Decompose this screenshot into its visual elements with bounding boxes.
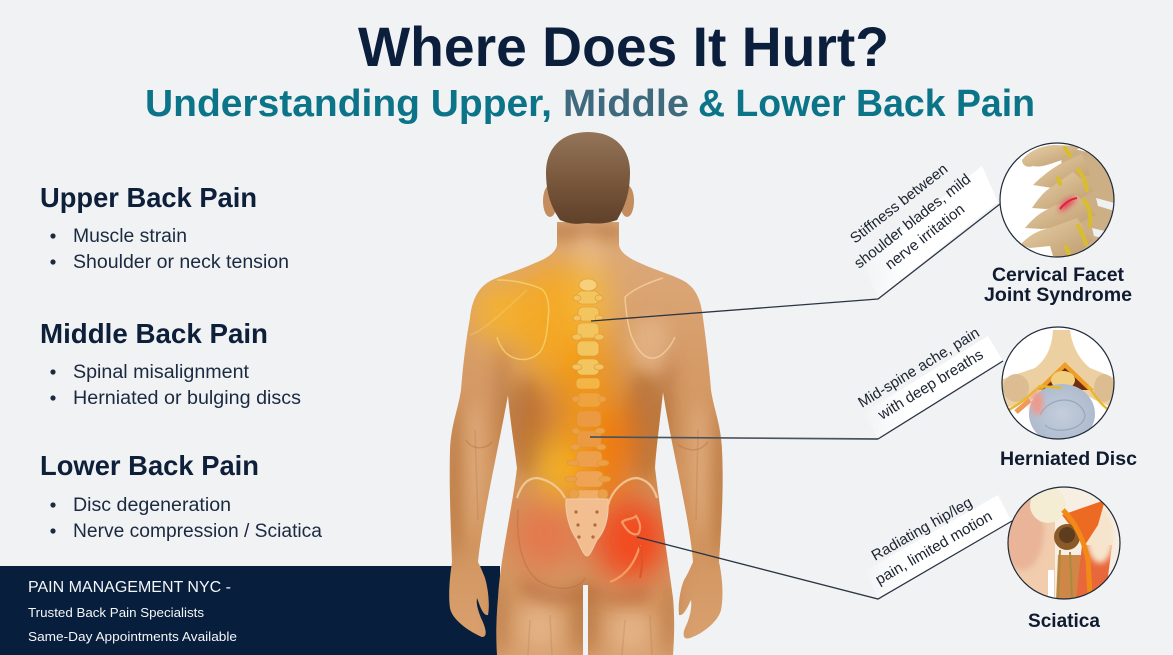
label: cervical facet: Cervical Facet bbox=[992, 264, 1124, 286]
panel: lower back pain bbox=[40, 450, 322, 542]
callout text: lower back: pain, limited motion bbox=[872, 508, 995, 588]
label: sciatica: Sciatica bbox=[1028, 610, 1100, 632]
callout text: upper back: shoulder blades, mild bbox=[851, 171, 974, 272]
leader line: upper back bbox=[591, 204, 1000, 321]
label: herniated disc: Herniated Disc bbox=[1000, 448, 1137, 470]
ears bbox=[543, 185, 634, 217]
callout: upper back bbox=[591, 160, 1000, 321]
subtitle: Middle bbox=[563, 83, 689, 125]
subtitle: & Lower Back Pain bbox=[698, 83, 1035, 125]
list: middle back causes: Spinal misalignment bbox=[73, 362, 250, 383]
leader line: lower back bbox=[637, 521, 1012, 599]
shading and pain glows bbox=[449, 224, 726, 655]
muscle outlines bbox=[466, 278, 708, 655]
hair bbox=[546, 132, 630, 224]
callout: lower back bbox=[637, 494, 1012, 599]
callout text: upper back: Stiffness between bbox=[847, 160, 951, 247]
leader line: middle back bbox=[590, 437, 878, 439]
heading: middle back: Middle Back Pain bbox=[40, 318, 268, 349]
label: cervical facet bbox=[984, 264, 1132, 306]
list: lower back causes: Disc degeneration bbox=[73, 495, 231, 516]
callout text: middle back: with deep breaths bbox=[874, 346, 986, 424]
list: middle back causes bbox=[50, 362, 301, 409]
list: upper back causes: Shoulder or neck tension bbox=[73, 252, 289, 273]
list: upper back causes: Muscle strain bbox=[73, 226, 187, 247]
subtitle: Understanding Upper, bbox=[145, 83, 552, 125]
list: lower back causes: Nerve compression / Sciatica bbox=[73, 521, 322, 542]
illustration: human back figure bbox=[449, 132, 726, 655]
hip joint highlight bbox=[610, 516, 642, 582]
icon: herniated disc bbox=[1000, 327, 1118, 444]
heading: upper back: Upper Back Pain bbox=[40, 182, 257, 213]
list: middle back causes: Herniated or bulging discs bbox=[73, 388, 301, 409]
list: lower back causes bbox=[50, 495, 322, 542]
label: cervical facet: Joint Syndrome bbox=[984, 284, 1132, 306]
title: Where Does It Hurt? bbox=[358, 15, 889, 78]
icon: sciatica bbox=[1000, 485, 1120, 605]
panel: middle back pain bbox=[40, 318, 301, 409]
body silhouette bbox=[449, 222, 723, 655]
sacrum bbox=[566, 499, 608, 556]
callout: middle back bbox=[590, 324, 1003, 439]
heading: lower back: Lower Back Pain bbox=[40, 450, 259, 481]
icon: cervical facet joint bbox=[1000, 143, 1120, 260]
panel: upper back pain bbox=[40, 182, 289, 273]
spine bbox=[565, 279, 611, 504]
list: upper back causes bbox=[50, 226, 289, 273]
footer banner bbox=[0, 566, 500, 655]
footer banner: PAIN MANAGEMENT NYC - bbox=[28, 579, 231, 596]
callout text: upper back: nerve irritation bbox=[882, 201, 968, 273]
footer banner: Trusted Back Pain Specialists bbox=[28, 606, 204, 620]
footer banner: Same-Day Appointments Available bbox=[28, 630, 237, 644]
callout text: middle back: Mid-spine ache, pain bbox=[855, 324, 983, 411]
callout text: lower back: Radiating hip/leg bbox=[869, 494, 975, 564]
subtitle bbox=[145, 83, 1035, 125]
